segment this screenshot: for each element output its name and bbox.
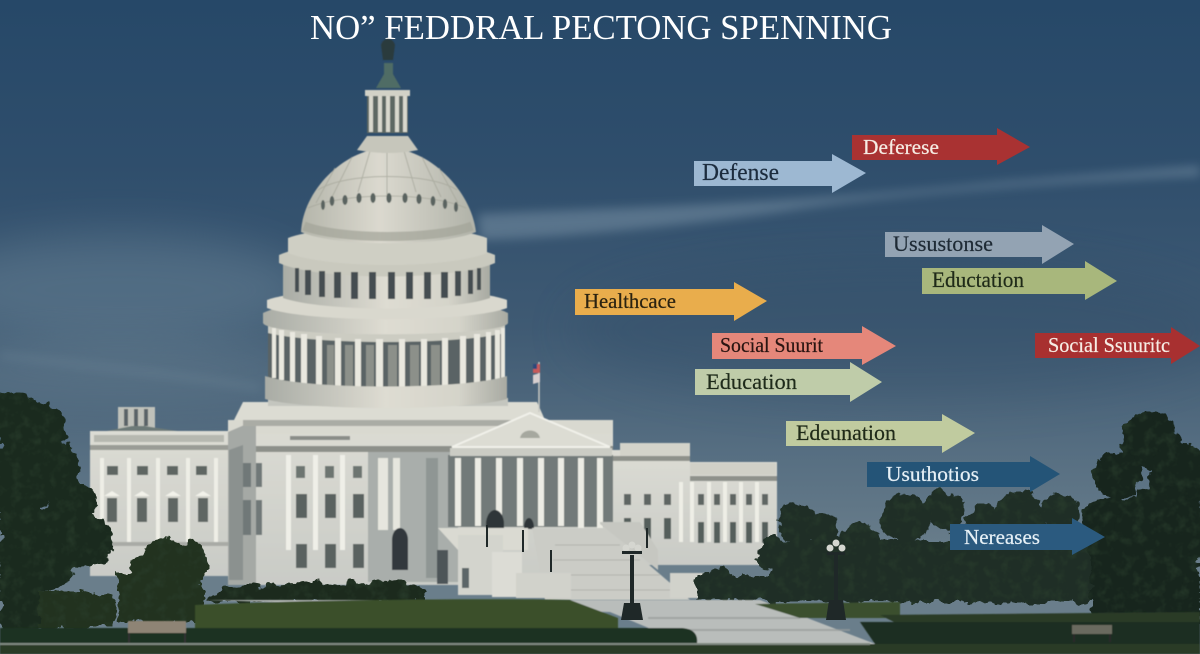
dome <box>301 148 476 243</box>
flag <box>533 362 540 412</box>
arrow: Usuthotios <box>867 456 1060 492</box>
capitol building <box>90 39 777 600</box>
arrow: Usuthotios: Usuthotios <box>886 462 979 486</box>
trees and shrubs <box>0 392 1200 630</box>
arrow: Edeunation <box>786 414 975 453</box>
upper ring <box>263 298 508 334</box>
bench right <box>1072 625 1112 642</box>
central block <box>228 420 613 585</box>
right wing <box>610 443 777 565</box>
arrow: Nereases <box>950 518 1105 555</box>
left shrubs <box>40 538 425 628</box>
arrow: Defense <box>694 154 866 193</box>
title: NO” FEDDRAL PECTONG SPENNING <box>310 8 892 47</box>
dome peristyle band <box>288 227 487 265</box>
statue <box>381 39 395 60</box>
lantern <box>357 63 418 153</box>
left tree <box>0 392 114 630</box>
arrow: Ussustonse: Ussustonse <box>893 231 993 256</box>
bench left <box>128 621 186 643</box>
grand staircase <box>532 522 690 600</box>
arrow: Edeunation: Edeunation <box>796 420 896 445</box>
arrow: Social Suurit <box>712 326 896 365</box>
lawn <box>195 599 618 632</box>
lamp posts <box>486 525 846 620</box>
arrow: Education: Education <box>706 369 797 394</box>
arrow: Deferese: Deferese <box>863 135 939 159</box>
arrow: Defense: Defense <box>702 160 779 186</box>
spending arrows <box>575 128 1200 555</box>
arrow: Nereases: Nereases <box>964 525 1040 549</box>
mid trees right <box>695 490 1100 602</box>
arrow: Eductation <box>922 261 1117 300</box>
bottom strip <box>0 644 1200 654</box>
arrow: Social Ssuuritc: Social Ssuuritc <box>1048 333 1170 357</box>
hedges <box>0 628 697 643</box>
arrow: Eductation: Eductation <box>932 267 1024 292</box>
arrow: Healthcace: Healthcace <box>584 289 676 313</box>
portico <box>448 413 613 529</box>
dome base ring <box>265 376 507 408</box>
right tree <box>1082 412 1200 625</box>
upper drum <box>279 242 495 308</box>
arrow: Education <box>695 362 882 402</box>
arrow: Ussustonse <box>885 225 1074 264</box>
arrow: Healthcace <box>575 282 767 321</box>
arrow: Deferese <box>852 128 1030 165</box>
plaza <box>205 600 878 645</box>
arrow: Social Ssuuritc <box>1035 327 1200 364</box>
arrow: Social Suurit: Social Suurit <box>720 333 823 357</box>
dome lower skirt <box>234 398 545 426</box>
stair side blocks <box>437 528 713 598</box>
left wing <box>90 407 235 576</box>
lawn and plaza <box>0 599 1200 654</box>
lower colonnade <box>268 323 505 390</box>
